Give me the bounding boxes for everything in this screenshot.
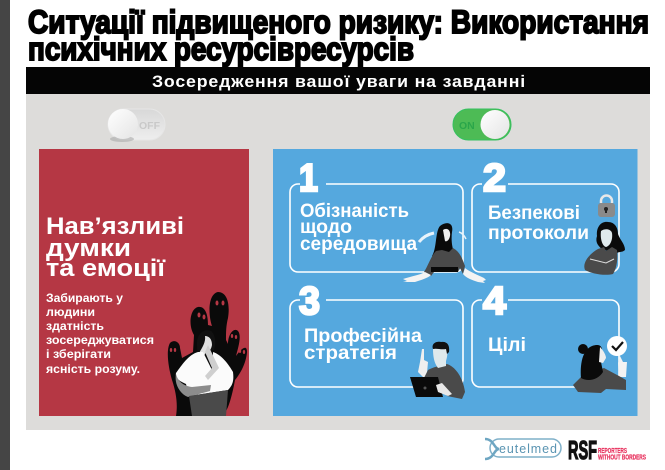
toggle: on <box>453 109 511 140</box>
logo: reporters without borders: REPORTERS <box>598 448 627 455</box>
subtitle banner <box>26 67 650 94</box>
card 4 <box>472 280 627 393</box>
card 2: 2 <box>483 157 506 200</box>
card 3: стратегія <box>304 343 397 364</box>
subtitle banner: Зосередження вашої уваги на завданні <box>152 72 526 91</box>
body text: intrusive thoughts: здатність <box>46 319 104 333</box>
card 1: щодо <box>300 217 352 238</box>
panel: intrusive thoughts <box>39 149 249 416</box>
card 1: середовища <box>300 234 417 255</box>
toggle: off <box>108 109 165 142</box>
logo: eutelmed: eutelmed <box>499 442 557 456</box>
body text: intrusive thoughts: зосереджуватися <box>46 333 154 347</box>
icon: woman with crossed arms <box>584 222 625 275</box>
body text: intrusive thoughts: людини <box>46 305 95 319</box>
logo: reporters without borders <box>568 435 646 465</box>
main grey panel <box>26 94 650 430</box>
card 2: Безпекові <box>488 203 580 224</box>
heading: intrusive thoughts <box>46 213 184 282</box>
icon: woman gesturing <box>403 223 486 283</box>
body text: intrusive thoughts: ясність розуму. <box>46 362 140 376</box>
card 2: протоколи <box>488 223 589 244</box>
card 2 <box>472 157 625 275</box>
toggle: off: OFF <box>139 120 161 132</box>
logo: reporters without borders: RSF <box>568 435 597 465</box>
body text: intrusive thoughts <box>46 291 154 376</box>
icon: padlock <box>598 196 615 217</box>
heading: intrusive thoughts: думки <box>46 235 131 262</box>
card 4: Цілі <box>488 335 526 356</box>
card 4: 4 <box>483 280 506 323</box>
card 1: Обізнаність <box>300 201 409 222</box>
icon: woman with checkmark <box>573 336 627 393</box>
body text: intrusive thoughts: Забирають у <box>46 291 123 305</box>
card 1 <box>290 157 486 283</box>
heading: intrusive thoughts: Нав’язливі <box>46 213 184 240</box>
toggle: on: ON <box>459 120 475 132</box>
card 3: 3 <box>299 280 320 323</box>
title: психічних ресурсівресурсів <box>28 31 414 67</box>
card 3 <box>290 280 465 399</box>
logo: eutelmed <box>485 439 561 459</box>
left edge bar <box>0 0 10 470</box>
icon: person with ghosts <box>168 292 247 416</box>
icon: man with laptop <box>410 342 465 399</box>
card 3: Професійна <box>304 326 422 347</box>
body text: intrusive thoughts: і зберігати <box>46 347 111 361</box>
card 1: 1 <box>299 157 318 200</box>
title <box>28 4 649 67</box>
panel: four resources <box>273 149 638 416</box>
heading: intrusive thoughts: та емоції <box>46 255 166 282</box>
